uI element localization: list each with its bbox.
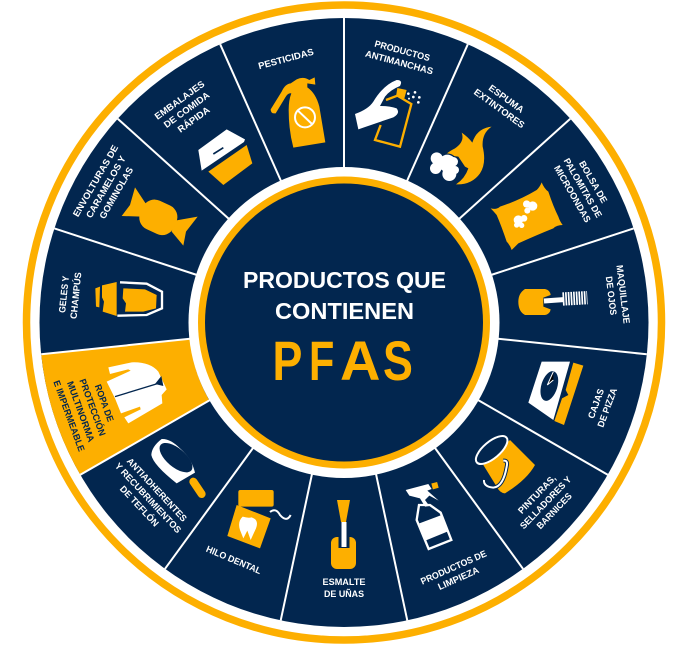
label: geles y champus: GELES Y <box>57 275 71 313</box>
label: maquillaje de ojos: DE OJOS <box>604 276 618 316</box>
label: pesticidas: PESTICIDAS <box>257 47 315 71</box>
icon: popcorn bag <box>491 182 563 250</box>
icon: dental floss <box>227 490 291 548</box>
title: PRODUCTOS QUE <box>243 267 446 293</box>
label: maquillaje de ojos <box>602 264 632 326</box>
label: productos antimanchas: ANTIMANCHAS <box>364 49 434 76</box>
label: envolturas: ENVOLTURAS DE <box>71 143 120 219</box>
label: pinturas: SELLADORES Y <box>518 474 574 531</box>
label: hilo dental: HILO DENTAL <box>205 544 263 576</box>
label: embalajes de comida rapida: EMBALAJES <box>153 79 206 122</box>
label: espuma extintores: EXTINTORES <box>472 87 526 130</box>
icon: frying pan <box>151 438 202 494</box>
label: cajas de pizza <box>584 382 619 429</box>
highlighted segment: protective clothing <box>41 339 209 475</box>
label: ropa de proteccion: E IMPERMEABLE <box>51 379 86 453</box>
label: antiadherentes: DE TEFLÓN <box>118 483 162 529</box>
label: bolsa de palomitas <box>551 150 614 226</box>
icon: paint bucket <box>471 431 535 493</box>
icon: pizza box <box>528 362 583 425</box>
PFAS heading: S <box>383 329 413 392</box>
segment dividers <box>41 18 647 620</box>
label: envolturas: GOMINOLAS <box>98 165 135 221</box>
PFAS heading: P <box>272 329 302 392</box>
icon: jacket <box>107 362 167 423</box>
label: bolsa de palomitas: PALOMITAS DE <box>562 156 604 220</box>
icon: fast food box <box>198 129 252 185</box>
icon: shampoo bottle <box>95 282 162 316</box>
icon: flame and foam <box>430 127 492 184</box>
label: cajas de pizza: DE PIZZA <box>596 387 619 429</box>
label: cajas de pizza: CAJAS <box>586 387 606 420</box>
label: envolturas <box>71 143 141 231</box>
inner white ring and centre disc <box>188 167 500 478</box>
label: bolsa de palomitas: MICROONDAS <box>552 164 593 224</box>
label: bolsa de palomitas: BOLSA DE <box>577 159 609 205</box>
icon: spray cleaner <box>406 482 451 549</box>
label: ropa de proteccion <box>51 366 122 453</box>
label: esmalte de unas: ESMALTE <box>322 577 366 587</box>
label: antiadherentes <box>104 453 192 543</box>
label: pinturas: PINTURAS, <box>516 473 558 516</box>
label: ropa de proteccion: PROTECCIÓN <box>77 377 108 438</box>
title: CONTIENEN <box>275 298 414 324</box>
label: esmalte de unas <box>322 577 366 599</box>
label: productos antimanchas <box>364 37 437 76</box>
icon: nail polish <box>331 500 356 569</box>
label: espuma extintores: ESPUMA <box>487 83 526 115</box>
PFAS heading: F <box>309 330 334 393</box>
label: ropa de proteccion: ROPA DE <box>93 383 115 423</box>
label: antiadherentes: ANTIADHERENTES <box>125 456 189 524</box>
label: ropa de proteccion: MULTINORMA <box>65 380 96 444</box>
label: pinturas <box>510 466 582 539</box>
label: geles y champus <box>57 270 83 320</box>
label: embalajes de comida rapida <box>153 79 221 141</box>
icon: mascara <box>518 289 587 315</box>
label: maquillaje de ojos: MAQUILLAJE <box>614 264 632 324</box>
icon: candy <box>122 187 198 246</box>
icon: hand with spray <box>355 80 421 147</box>
label: productos de limpieza: PRODUCTOS DE <box>419 549 488 587</box>
label: antiadherentes: Y RECUBRIMIENTOS <box>113 461 183 535</box>
label: embalajes de comida rapida: RÁPIDA <box>176 105 212 135</box>
label: embalajes de comida rapida: DE COMIDA <box>162 90 212 130</box>
label: esmalte de unas: DE UÑAS <box>324 589 364 599</box>
label: productos de limpieza: LIMPIEZA <box>436 565 481 592</box>
label: productos antimanchas: PRODUCTOS <box>373 39 431 63</box>
icon: pesticide sprayer <box>271 77 325 148</box>
PFAS heading: A <box>340 329 380 392</box>
title <box>243 267 446 324</box>
label: envolturas: CARAMELOS Y <box>84 153 128 220</box>
label: geles y champus: CHAMPÚS <box>68 272 83 320</box>
label: pinturas: BARNICES <box>535 491 574 531</box>
PFAS heading <box>272 329 413 393</box>
